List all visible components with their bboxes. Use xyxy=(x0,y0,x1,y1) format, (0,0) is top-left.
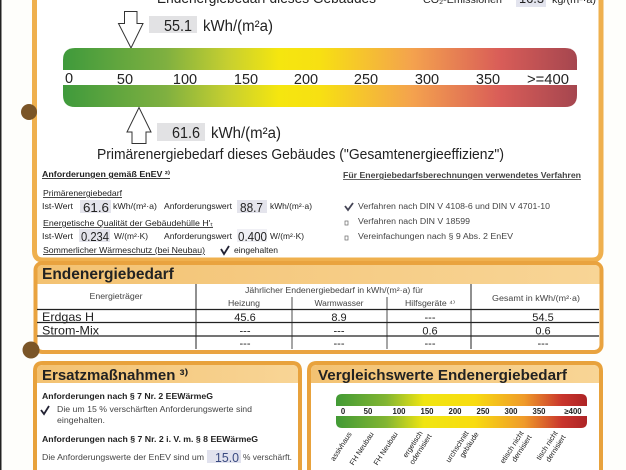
block: requirements § 7: eingehalten. xyxy=(57,415,105,425)
value: final energy: 55.1 xyxy=(164,18,192,35)
block: requirements § 8: Anforderungen nach § 7 Nr. 2 i. V. m. § 8 EEWärmeG xyxy=(42,434,258,444)
block: requirements xyxy=(42,169,312,255)
block: calculation method: Verfahren nach DIN V 18599 xyxy=(358,217,471,226)
comparison labels: ≥400 xyxy=(564,407,582,416)
scale labels: 200 xyxy=(294,72,318,88)
value: primary energy: kWh/(m²a) xyxy=(211,125,281,142)
block: requirements: 0.234 xyxy=(81,230,109,244)
block: requirements § 8: Die Anforderungswerte der EnEV sind um xyxy=(42,452,204,462)
rotated building categories: assivhaus xyxy=(328,430,354,463)
rotated building categories: odernisiert xyxy=(407,432,434,466)
scale labels: 150 xyxy=(234,72,258,88)
block: requirements § 8 xyxy=(42,434,292,465)
table: final energy demand: --- xyxy=(334,326,345,338)
scale labels: 350 xyxy=(476,72,500,88)
value: primary energy: 61.6 xyxy=(172,125,200,142)
block: requirements § 7 xyxy=(41,391,252,425)
scan edge line xyxy=(0,0,2,470)
block: requirements: Primärenergiebedarf xyxy=(43,188,123,198)
block: requirements § 7: Anforderungen nach § 7 Nr. 2 EEWärmeG xyxy=(42,391,213,401)
scale labels: 50 xyxy=(117,72,133,88)
comparison scale: lower xyxy=(336,416,587,428)
block: requirements: Ist-Wert xyxy=(42,201,74,211)
heading band xyxy=(311,365,599,383)
panel: Vergleichswerte xyxy=(309,363,601,470)
table: final energy demand: Gesamt in kWh/(m²·a) xyxy=(492,294,580,303)
heading: Ersatzmaßnahmen: Ersatzmaßnahmen ³⁾ xyxy=(42,367,189,384)
block: requirements: Anforderungswert xyxy=(164,231,233,241)
table: final energy demand: --- xyxy=(240,338,251,350)
rotated building categories: dernisiert xyxy=(544,433,568,464)
block: requirements: 0.400 xyxy=(238,230,267,244)
value: primary energy xyxy=(157,123,281,142)
value: final energy xyxy=(149,16,273,35)
block: requirements: Sommerlicher Wärmeschutz (bei Neubau) xyxy=(43,245,205,255)
table: final energy demand: 0.6 xyxy=(535,326,551,338)
CO2 emissions xyxy=(423,0,596,7)
rotated building categories: etisch nicht xyxy=(498,429,526,465)
table: final energy demand: Strom-Mix xyxy=(42,324,99,338)
table: final energy demand: Erdgas H xyxy=(42,310,94,324)
table: final energy demand: 54.5 xyxy=(532,312,554,324)
table: final energy demand: Heizung xyxy=(228,299,260,308)
block: requirements § 8: % verschärft. xyxy=(243,452,292,462)
block: requirements § 8: 15.0 xyxy=(215,451,239,465)
block: requirements: eingehalten xyxy=(234,245,278,255)
table: final energy demand: Energieträger xyxy=(90,292,143,301)
arrow: final energy marker xyxy=(118,12,143,48)
rotated building categories xyxy=(328,429,568,467)
scale labels: 100 xyxy=(173,72,197,88)
table: final energy demand xyxy=(37,284,599,350)
panel: Ersatzmaßnahmen xyxy=(35,363,300,470)
scale bar: upper xyxy=(63,48,577,70)
panel: Endenergiebedarf xyxy=(36,263,602,352)
scale labels: 0 xyxy=(65,71,73,87)
table: final energy demand: --- xyxy=(424,338,436,350)
scale labels: 300 xyxy=(415,72,439,88)
table: final energy demand: 45.6 xyxy=(234,312,256,324)
comparison labels: 350 xyxy=(532,407,546,416)
scale labels: 250 xyxy=(354,72,378,88)
block: calculation method: Vereinfachungen nach § 9 Abs. 2 EnEV xyxy=(358,232,514,241)
block: requirements: W/(m²·K) xyxy=(114,231,148,241)
block: requirements: 88.7 xyxy=(240,201,263,215)
value: final energy: kWh/(m²a) xyxy=(203,18,273,35)
block: calculation method: Verfahren nach DIN V 4108-6 und DIN V 4701-10 xyxy=(358,202,551,211)
scale bar: lower xyxy=(63,85,577,107)
scale labels xyxy=(65,71,569,88)
table: final energy demand: Warmwasser xyxy=(314,299,364,308)
comparison scale: upper xyxy=(336,394,587,406)
heading band xyxy=(38,265,600,284)
comparison labels: 150 xyxy=(420,407,434,416)
table: final energy demand: Hilfsgeräte ⁴⁾ xyxy=(405,299,455,308)
icon: punch hole lower xyxy=(22,342,40,358)
heading: Vergleichswerte: Vergleichswerte Endenergiebedarf xyxy=(318,367,568,384)
block: requirements: Anforderungen gemäß EnEV ²⁾ xyxy=(42,169,170,179)
table: final energy demand: --- xyxy=(334,338,345,350)
table: final energy demand: --- xyxy=(424,312,436,324)
block: requirements § 7: Die um 15 % verschärften Anforderungswerte sind xyxy=(57,404,252,414)
block: calculation method xyxy=(343,170,581,241)
rotated building categories: gebäude xyxy=(457,430,481,459)
heading band xyxy=(37,365,298,383)
heading: primary energy: Primärenergiebedarf dieses Gebäudes ("Gesamtenergieeffizienz") xyxy=(97,147,504,163)
rotated building categories: ergetisch xyxy=(401,429,425,459)
heading: Endenergiebedarf: Endenergiebedarf xyxy=(42,266,175,283)
comparison labels: 50 xyxy=(364,407,373,416)
block: requirements: Ist-Wert xyxy=(42,231,74,241)
arrow: primary energy marker xyxy=(127,108,151,144)
block: calculation method: Für Energiebedarfsberechnungen verwendetes Verfahren xyxy=(343,170,581,180)
comparison labels: 200 xyxy=(448,407,462,416)
rotated building categories: tisch nicht xyxy=(534,429,560,462)
table: final energy demand: --- xyxy=(538,338,549,350)
comparison labels xyxy=(341,407,582,416)
block: requirements: W/(m²·K) xyxy=(270,231,304,241)
rotated building categories: urchschnitt xyxy=(444,429,471,464)
scale labels: >=400 xyxy=(527,72,569,88)
block: requirements: 61.6 xyxy=(83,201,109,215)
comparison labels: 300 xyxy=(504,407,518,416)
rotated building categories: dernisiert xyxy=(510,433,534,464)
table: final energy demand: Jährlicher Endenergiebedarf in kWh/(m²·a) für xyxy=(245,286,423,295)
comparison labels: 0 xyxy=(341,407,346,416)
comparison labels: 100 xyxy=(392,407,406,416)
block: requirements: kWh/(m²·a) xyxy=(113,201,157,211)
rotated building categories: FH Neubau xyxy=(372,430,400,467)
rotated building categories: FH Neubau xyxy=(348,430,376,467)
icon: punch hole upper xyxy=(21,104,37,120)
block: requirements: Energetische Qualität der Gebäudehülle H'ₜ xyxy=(43,218,213,228)
table: final energy demand: 0.6 xyxy=(422,326,438,338)
comparison labels: 250 xyxy=(476,407,490,416)
panel: energy scale xyxy=(34,0,601,260)
block: requirements: Anforderungswert xyxy=(164,201,233,211)
table: final energy demand: 8.9 xyxy=(331,312,347,324)
table: final energy demand: --- xyxy=(240,326,251,338)
block: requirements: kWh/(m²·a) xyxy=(270,201,312,211)
